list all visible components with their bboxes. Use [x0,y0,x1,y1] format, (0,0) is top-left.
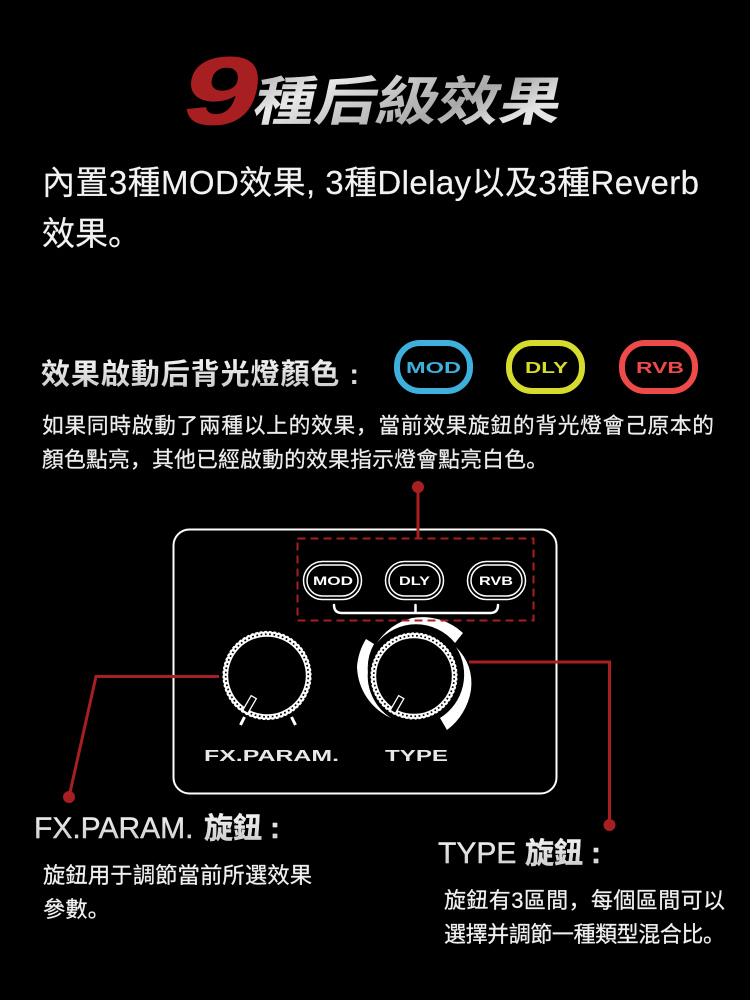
knob label: TYPE: TYPE [385,748,448,765]
text: FX.PARAM description: 旋鈕用于調節當前所選效果 [43,863,312,888]
button: DLY: DLY [399,576,430,588]
device panel [174,530,556,794]
intro paragraph: 效果。 [42,215,141,252]
knob: TYPE [357,617,471,730]
chip: MOD: MOD [406,360,461,377]
knob: FX.PARAM [222,631,312,725]
leader: TYPE knob [469,662,616,831]
title number 9: 9 [174,38,272,145]
chip: RVB: RVB [636,360,684,377]
heading: TYPE knob: : [591,837,601,870]
title [174,38,568,145]
heading: TYPE knob: 旋鈕 [525,837,583,870]
button: RVB [468,562,526,600]
heading: FX.PARAM knob: FX.PARAM. [34,812,193,845]
text: TYPE description: 選擇并調節一種類型混合比。 [444,922,725,947]
chip: DLY: DLY [525,360,568,377]
chip: DLY [509,343,582,391]
highlight: dashed box over buttons [298,538,534,620]
heading: FX.PARAM knob: : [270,812,280,845]
leader: buttons [412,481,424,538]
button: RVB: RVB [479,576,513,588]
heading: FX.PARAM knob: 旋鈕 [204,812,262,845]
knob label: FX.PARAM.: FX.PARAM. [204,748,339,765]
heading: TYPE knob: TYPE [438,837,516,870]
button: DLY [386,562,444,600]
button: MOD: MOD [313,576,353,588]
description paragraph: 如果同時啟動了兩種以上的效果，當前效果旋鈕的背光燈會己原本的 [42,413,714,438]
button: MOD [304,562,362,600]
description paragraph [42,413,714,472]
text: TYPE description [444,888,725,947]
intro paragraph [42,164,699,252]
intro paragraph: 內置3種MOD效果, 3種Dlelay以及3種Reverb [42,164,699,201]
chip: MOD [397,343,470,391]
bracket joining buttons [334,605,498,613]
chip: RVB [622,343,695,391]
text: FX.PARAM description: 參數。 [43,897,110,922]
heading: backlight colours: 效果啟動后背光燈顏色 : [41,358,359,391]
description paragraph: 顏色點亮，其他已經啟動的效果指示燈會點亮白色。 [42,447,548,472]
text: TYPE description: 旋鈕有3區間，每個區間可以 [444,888,725,913]
leader: FX.PARAM knob [63,676,219,803]
zone arcs [377,617,463,643]
text: FX.PARAM description [43,863,312,922]
title text: 種后級效果 [248,73,568,132]
